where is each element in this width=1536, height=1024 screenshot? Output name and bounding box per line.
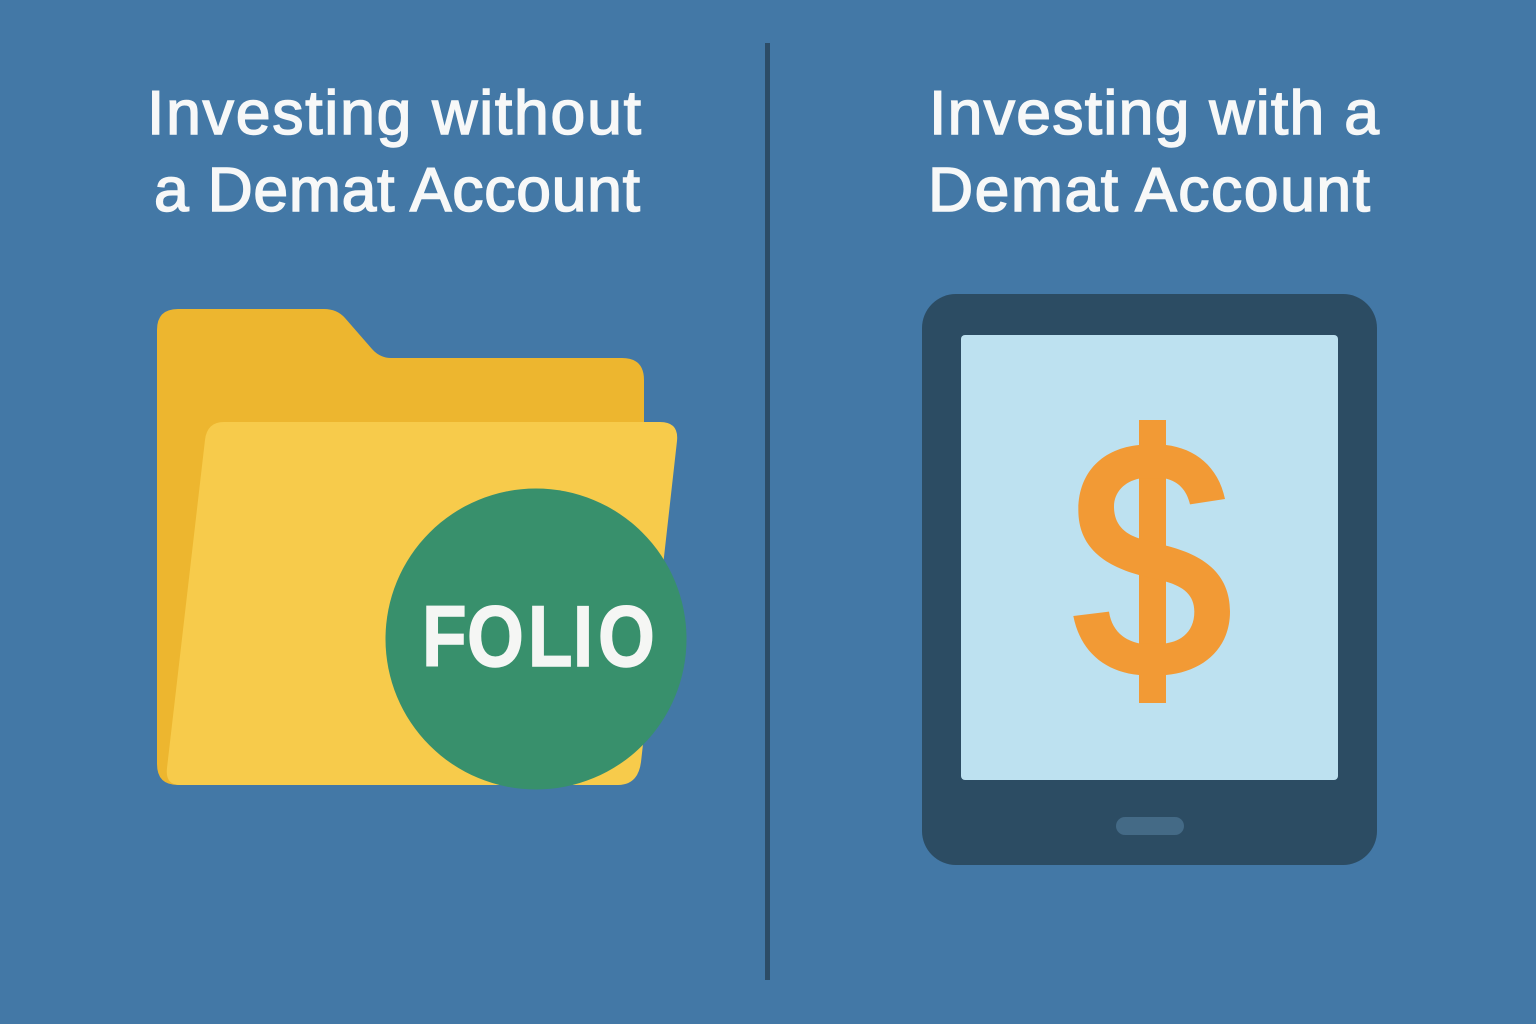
tablet body bbox=[922, 294, 1377, 865]
folder back bbox=[157, 309, 644, 785]
heading: left: a Demat Account bbox=[154, 155, 640, 225]
heading: left: Investing without bbox=[147, 78, 641, 148]
center divider bbox=[765, 43, 770, 980]
dollar sign bbox=[1073, 420, 1230, 703]
tablet screen bbox=[961, 335, 1338, 780]
heading: right bbox=[928, 78, 1379, 225]
folio badge: FOLIO bbox=[422, 588, 655, 684]
heading: left bbox=[147, 78, 641, 225]
heading: right: Demat Account bbox=[928, 155, 1370, 225]
home button bbox=[1116, 817, 1184, 835]
folder front bbox=[167, 422, 677, 785]
heading: right: Investing with a bbox=[929, 78, 1379, 148]
icon: folder with folio badge bbox=[157, 309, 686, 790]
icon: tablet with dollar sign bbox=[922, 294, 1377, 865]
folio badge bbox=[386, 488, 686, 790]
